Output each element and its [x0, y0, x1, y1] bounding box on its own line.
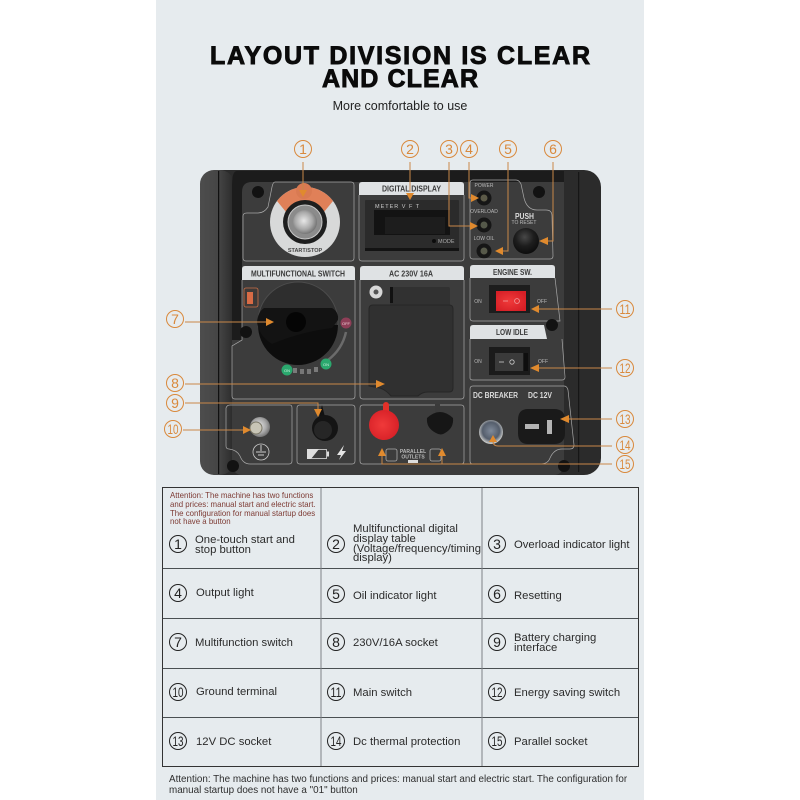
row 2: 4 [174, 585, 182, 601]
section: ground terminal [226, 405, 292, 464]
callout 14 [489, 435, 634, 454]
callout 2: 2 [406, 141, 414, 157]
row 1: stop button [195, 544, 251, 556]
callout 5 [495, 140, 516, 255]
callout 3: 3 [445, 141, 453, 157]
row 3 [170, 632, 596, 654]
section: AC socket [360, 266, 464, 399]
section: AC socket: AC 230V 16A [389, 270, 433, 278]
section: indicator lights and reset: PUSH [515, 212, 534, 221]
title: LAYOUT DIVISION IS CLEAR [210, 42, 590, 70]
callout 12 [530, 360, 634, 376]
row 3: 9 [493, 634, 501, 650]
row 5 [170, 732, 588, 750]
section: digital display: DIGITAL DISPLAY [382, 184, 442, 194]
page background [156, 0, 644, 800]
section: indicator lights and reset: LOW OIL [474, 236, 495, 242]
row 1: One-touch start and [195, 534, 295, 546]
icon: lightning bolt [337, 445, 346, 460]
row 5: 13 [172, 733, 184, 749]
attention note in cell: Attention: The machine has two functions [170, 491, 313, 500]
attention note in cell: The configuration for manual startup does [170, 509, 315, 518]
section: low idle: OFF [538, 359, 548, 365]
row 1: Overload indicator light [514, 539, 630, 551]
row 3: Multifunction switch [195, 637, 293, 649]
callout 14: 14 [620, 437, 631, 453]
callout 15 [378, 448, 634, 472]
callout 9: 9 [171, 395, 179, 411]
attention note in cell: not have a button [170, 517, 231, 526]
table [162, 488, 638, 766]
section: start stop: START/STOP [288, 248, 322, 254]
callout 8: 8 [171, 375, 179, 391]
dial indicators: ON [323, 362, 329, 367]
callout 11: 11 [620, 301, 631, 317]
row 1: 2 [332, 536, 340, 552]
dial indicators: OFF [342, 321, 351, 326]
section: indicator lights and reset [470, 180, 553, 259]
callout 2 [402, 140, 418, 200]
section: engine switch: ENGINE SW. [493, 268, 532, 277]
section: parallel outlets: OUTLETS [401, 454, 425, 460]
section: start stop [243, 182, 354, 261]
row 4: 11 [330, 684, 342, 700]
row 2: Resetting [514, 590, 562, 602]
row 5: Dc thermal protection [353, 736, 460, 748]
callout 4: 4 [465, 141, 473, 157]
row 3: 8 [332, 634, 340, 650]
row 1: display table [353, 533, 416, 545]
callout 6 [539, 140, 562, 245]
section: DC breaker and socket: DC 12V [528, 391, 553, 400]
callout 9 [166, 394, 322, 417]
row 2: 5 [332, 586, 340, 602]
screws [227, 186, 570, 472]
callout 5: 5 [504, 141, 512, 157]
section: engine switch [470, 265, 560, 321]
icon: fuel pump [244, 288, 258, 307]
callout 1 [294, 140, 312, 197]
section: parallel outlets: PARALLEL [400, 449, 426, 455]
callout 11 [531, 300, 634, 318]
section: multifunctional switch [232, 266, 355, 399]
row 5: Parallel socket [514, 736, 588, 748]
row 2 [170, 584, 562, 602]
callout 7: 7 [171, 311, 179, 327]
callout 10 [164, 420, 251, 438]
title [210, 42, 590, 93]
section: indicator lights and reset: TO RESET [512, 220, 536, 226]
section: parallel outlets [360, 402, 464, 464]
dial arc and knob [257, 282, 346, 365]
row 3: 7 [174, 634, 182, 650]
row 1 [170, 523, 630, 564]
row 1: 3 [493, 536, 501, 552]
section: DC breaker and socket [470, 386, 574, 464]
table grid [162, 488, 638, 766]
panel: generator control panel [200, 170, 601, 475]
row 4: Main switch [353, 687, 412, 699]
callout 12: 12 [620, 360, 631, 376]
callout 6: 6 [549, 141, 557, 157]
row 3: 230V/16A socket [353, 637, 439, 649]
section: engine switch: OFF [537, 299, 547, 305]
row 4: Ground terminal [196, 686, 277, 698]
section: multifunctional switch: MULTIFUNCTIONAL SWITCH [251, 270, 345, 278]
section: digital display: MODE [438, 239, 455, 245]
section: low idle [470, 325, 565, 380]
callout 15: 15 [620, 456, 631, 472]
callouts: numbered orange labels [164, 140, 634, 472]
section: indicator lights and reset: OVERLOAD [470, 209, 498, 215]
row 1: (Voltage/frequency/timing [353, 543, 481, 555]
row 1: 1 [174, 536, 182, 552]
row 2: Output light [196, 587, 255, 599]
panel body [200, 170, 601, 475]
row 4: 10 [172, 684, 184, 700]
row 5: 14 [330, 733, 342, 749]
callout 8 [166, 374, 385, 392]
footer note: manual startup does not have a "01" button [169, 785, 358, 796]
callout 3 [440, 140, 478, 230]
callout 10: 10 [168, 421, 179, 437]
row 4 [170, 684, 620, 700]
callout 7 [166, 310, 274, 328]
callout 4 [460, 140, 479, 202]
callout 13 [560, 410, 634, 428]
title: AND CLEAR [322, 65, 478, 93]
footer note: Attention: The machine has two functions and prices: manual start and electric start. The configuration for [169, 774, 628, 785]
row 5: 15 [492, 733, 503, 749]
section: indicator lights and reset: POWER [475, 183, 494, 189]
dial indicators: ON [284, 368, 290, 373]
attention note in cell: and prices: manual start and electric start. [170, 500, 316, 509]
row 2: Oil indicator light [353, 590, 437, 602]
callout 1: 1 [299, 141, 307, 157]
section: low idle: ON [474, 359, 482, 365]
section: engine switch: ON [474, 299, 482, 305]
row 3: Battery charging [514, 632, 596, 644]
row 3: interface [514, 642, 557, 654]
row 1: display) [353, 552, 392, 564]
row 4: Energy saving switch [514, 687, 620, 699]
dial indicators [282, 318, 352, 376]
row 5: 12V DC socket [196, 736, 272, 748]
section: low idle: LOW IDLE [496, 328, 529, 337]
row 4: 12 [492, 684, 503, 700]
section: DC breaker and socket: DC BREAKER [473, 391, 518, 400]
callout 13: 13 [620, 411, 631, 427]
row 2: 6 [493, 586, 501, 602]
subtitle: More comfortable to use [333, 99, 467, 113]
section: battery charging [297, 405, 355, 464]
row 1: Multifunctional digital [353, 523, 458, 535]
icon: battery [307, 449, 329, 459]
section: digital display [359, 182, 464, 261]
section: digital display: METER V F T [375, 204, 420, 210]
